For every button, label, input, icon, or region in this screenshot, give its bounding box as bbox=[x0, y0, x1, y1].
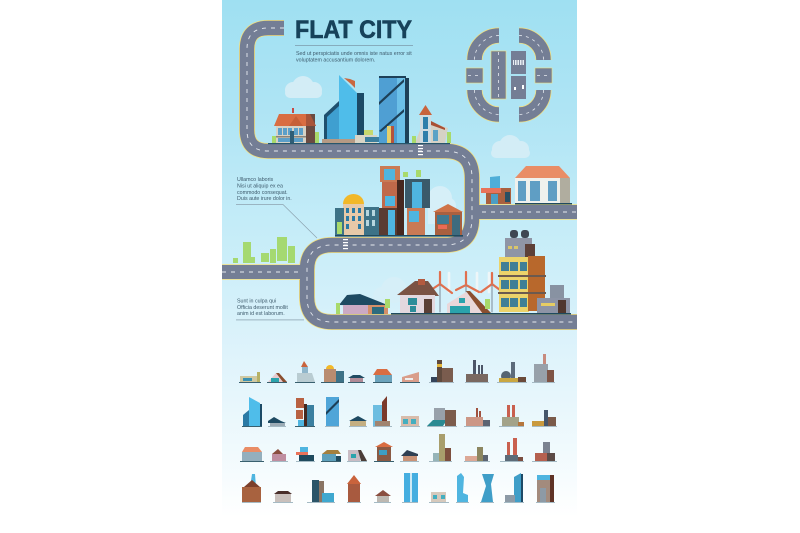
icon: red stacks factory bbox=[499, 405, 524, 427]
icon: modern villa bbox=[429, 492, 449, 503]
icon: dome hall bbox=[321, 365, 344, 383]
icon: stepped tower bbox=[504, 473, 524, 503]
icon: solar factory bbox=[427, 408, 457, 427]
icon: modern house bbox=[400, 416, 420, 427]
road crossings bbox=[343, 145, 423, 249]
left callout: lower: anim id est laborum. bbox=[237, 311, 285, 317]
icon: glass tower bbox=[325, 397, 339, 427]
icon: flat block bbox=[240, 447, 264, 462]
ground strip: upper scene bbox=[268, 143, 450, 144]
trees on left bbox=[233, 237, 295, 263]
icon: steep modern bbox=[347, 450, 367, 462]
icon: cut blue tower bbox=[456, 473, 469, 503]
left callout: lower bbox=[236, 298, 304, 320]
cloud: upper left bbox=[285, 76, 322, 98]
title rule bbox=[295, 44, 413, 47]
building: low shop bbox=[322, 130, 379, 143]
main road bbox=[222, 28, 577, 322]
left callout: upper: commodo consequat. bbox=[237, 190, 288, 196]
intro text: voluptatem accusantium dolorem. bbox=[296, 58, 375, 64]
poster background bbox=[222, 0, 577, 533]
icon: corner shop bbox=[374, 442, 394, 462]
icon: church bbox=[295, 361, 315, 383]
intro text: Sed ut perspiciatis unde omnis iste natus error sit bbox=[296, 51, 412, 57]
ground strip: middle scene bbox=[335, 235, 463, 237]
building: large flat block bbox=[515, 166, 572, 204]
building: two-storey brown roof house bbox=[397, 279, 439, 313]
building: orange block tower bbox=[379, 166, 430, 235]
icon: glass-top tower bbox=[536, 475, 555, 503]
building: domed hall bbox=[335, 194, 379, 235]
left callout: upper: Duis aute irure dolor in. bbox=[237, 196, 292, 202]
cloud: behind middle house bbox=[428, 186, 456, 224]
icon: twin blue tower bbox=[402, 473, 418, 503]
icon: small dark house bbox=[268, 417, 286, 427]
icon: low shop bbox=[239, 372, 261, 383]
icon: bungalow bbox=[348, 375, 365, 383]
cloud: upper right bbox=[491, 135, 530, 158]
icon: cooling plant bbox=[464, 447, 490, 462]
building: tall yellow tower bbox=[498, 230, 546, 312]
building: glass tower bbox=[379, 76, 409, 143]
ground strip: lower scene bbox=[391, 313, 571, 314]
building: striped-awning shop bbox=[481, 176, 511, 204]
icon: steep cottage bbox=[267, 373, 287, 383]
intro text bbox=[296, 51, 412, 64]
icon: refinery bbox=[497, 362, 527, 383]
icon: twisted tower bbox=[480, 474, 494, 503]
icon: brown tower bbox=[242, 474, 261, 503]
cloud: behind lower houses bbox=[373, 277, 417, 305]
icon: brown roof bbox=[321, 450, 341, 462]
icon: gray towers bbox=[307, 480, 335, 503]
icon row 3 bbox=[240, 434, 557, 462]
building: orange roof house bbox=[272, 108, 319, 143]
building: rooftop annex bbox=[537, 285, 570, 313]
icon row 4 bbox=[242, 473, 555, 503]
branch roads bbox=[222, 212, 577, 272]
wind turbines bbox=[431, 272, 500, 312]
road kit bbox=[466, 36, 552, 114]
building: church bbox=[412, 105, 451, 143]
title: FLAT CITY bbox=[295, 16, 412, 44]
icon: brick tower bbox=[347, 475, 361, 503]
straight road pieces bbox=[466, 51, 552, 99]
icon set bbox=[239, 354, 557, 503]
building: corner shop house bbox=[433, 204, 463, 235]
icon: glass corner tower bbox=[373, 396, 392, 427]
icon row 1 bbox=[239, 354, 555, 383]
left callout: upper bbox=[236, 177, 317, 238]
icon: red boiler plant bbox=[532, 442, 557, 462]
icon row 2 bbox=[242, 396, 557, 427]
icon: long cottage bbox=[273, 491, 293, 503]
left callout: lower: Sunt in culpa qui bbox=[237, 298, 276, 304]
icon: gray complex bbox=[532, 354, 555, 383]
left callout: upper: Ullamco laboris bbox=[237, 177, 274, 183]
icon: pink cottage bbox=[270, 449, 288, 462]
icon: factory yellow stack bbox=[429, 360, 454, 383]
icon: striped chimneys bbox=[500, 438, 524, 462]
icon: skyscraper with dome bbox=[429, 434, 452, 462]
left callout: upper: Nisi ut aliquip ex ea bbox=[237, 184, 283, 190]
icon: blue slanted tower bbox=[242, 397, 262, 427]
icon: small house bbox=[374, 490, 391, 503]
icon: power plant bbox=[465, 360, 489, 383]
building: blue slanted tower bbox=[324, 75, 364, 140]
icon: block tower bbox=[295, 398, 315, 427]
left callout: lower: Officia deserunt mollit bbox=[237, 305, 288, 311]
icon: dark roof cottage bbox=[400, 450, 419, 462]
icon: angled pink house bbox=[400, 372, 420, 383]
icon: bungalow bbox=[349, 416, 367, 427]
icon: awning shop bbox=[296, 447, 315, 462]
building: dark roof bungalow bbox=[336, 294, 390, 314]
icon: orange roof house bbox=[373, 369, 392, 383]
icon: tanks plant bbox=[532, 410, 557, 427]
icon: pink stacks factory bbox=[464, 408, 490, 427]
curved road pieces bbox=[474, 36, 544, 114]
building: steep roof cottage bbox=[447, 291, 492, 314]
